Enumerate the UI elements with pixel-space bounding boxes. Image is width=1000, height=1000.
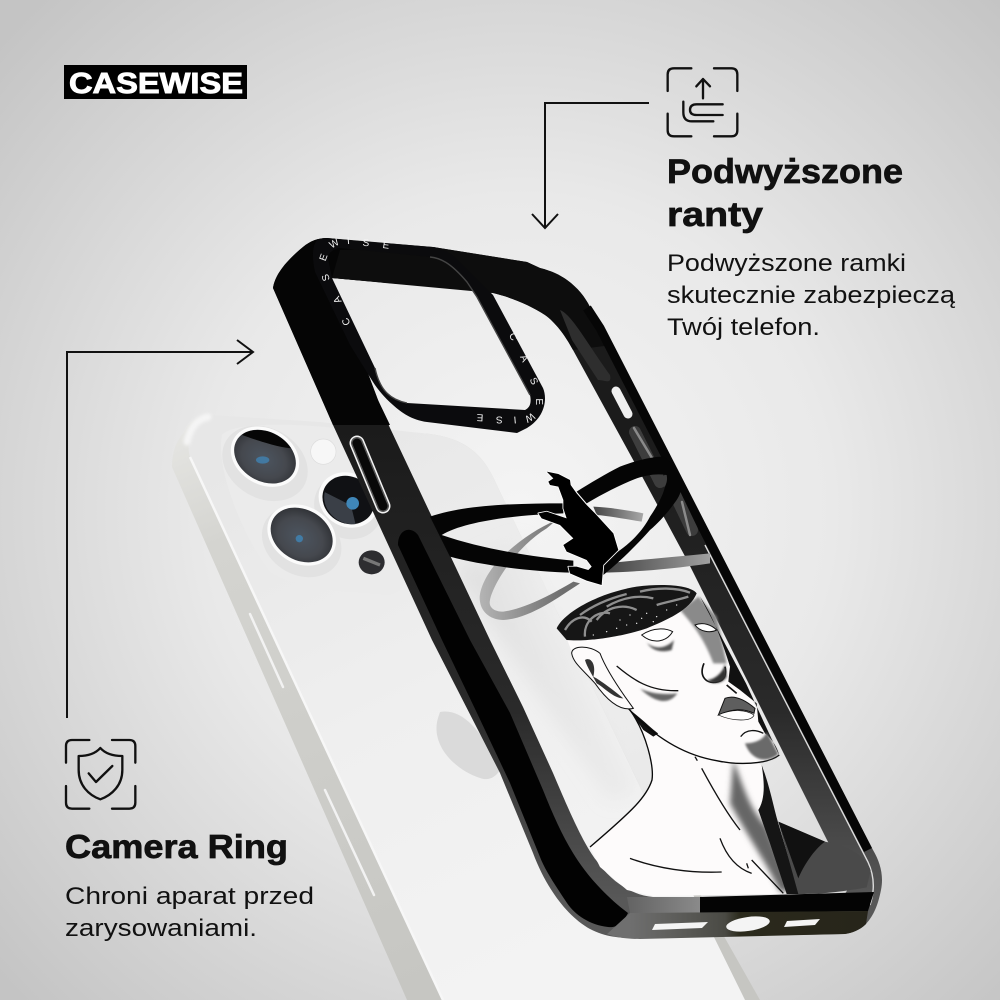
- arrow: to camera ring: [67, 340, 253, 718]
- ring logo text: [318, 236, 544, 425]
- text: camera ring description: zarysowaniami.: [65, 915, 257, 942]
- halo rings and diver: [430, 457, 710, 620]
- eyes: [642, 629, 673, 641]
- phone back: [189, 415, 745, 1000]
- text: camera ring description: [65, 883, 314, 942]
- camera ring: [313, 236, 545, 433]
- hair sparkles: [593, 604, 677, 636]
- logo: CASEWISE: CASEWISE: [69, 68, 243, 100]
- black phone case: [273, 238, 882, 939]
- lens top: [220, 414, 310, 499]
- sensor: [359, 550, 385, 574]
- nose: [702, 663, 737, 693]
- white phone: [172, 411, 760, 1000]
- ring logo text: W: [522, 410, 536, 424]
- ring logo text: W: [328, 237, 342, 251]
- case top black: [273, 238, 400, 425]
- hair: [557, 585, 697, 640]
- dark garment: [778, 822, 871, 894]
- ring logo text: E: [318, 252, 331, 263]
- icon: raised edges: [668, 68, 737, 136]
- phone seen through case: [455, 540, 643, 800]
- diving figure: [538, 472, 618, 585]
- lens shadow areas: [209, 411, 321, 516]
- heading: camera ring: Camera Ring: [65, 828, 288, 865]
- ring logo text: C: [506, 331, 519, 343]
- ring logo text: S: [527, 376, 540, 387]
- grey halo: [480, 507, 710, 620]
- neck shadow: [730, 760, 793, 892]
- right band highlight: [705, 545, 873, 905]
- camera module: [221, 425, 404, 595]
- face shadow: [700, 597, 779, 755]
- inner band panel: [560, 310, 610, 381]
- cameras: [209, 411, 394, 591]
- arrow: to raised edges: [532, 103, 649, 228]
- ring logo text: S: [496, 414, 503, 425]
- black halo left: [430, 503, 573, 573]
- ring logo text: I: [513, 414, 517, 425]
- icon: shield check: [66, 740, 135, 809]
- text: camera ring description: Chroni aparat przed: [65, 883, 314, 910]
- left band black slot: [398, 530, 628, 927]
- right band black edge: [587, 308, 868, 850]
- ring bevel: [375, 257, 530, 403]
- top band: [332, 247, 612, 350]
- ring logo text: E: [533, 398, 544, 405]
- neck and shoulders: [590, 708, 799, 896]
- side button: [357, 443, 383, 506]
- ring logo text: S: [320, 272, 333, 282]
- lens right: [308, 462, 388, 538]
- lens bottom: [256, 492, 347, 578]
- head: [557, 585, 779, 763]
- logo on back: [436, 712, 500, 779]
- text: raised edges description: Podwyższone ramki: [667, 250, 906, 277]
- black halo right: [577, 457, 682, 575]
- lens glints: [256, 456, 359, 542]
- text: raised edges description: skutecznie zabezpieczą: [667, 282, 956, 309]
- flash: [311, 439, 336, 464]
- ring logo text: E: [382, 240, 390, 252]
- ring logo text: C: [340, 316, 353, 327]
- bottom cutouts: [652, 914, 820, 934]
- ring logo text: S: [362, 238, 370, 249]
- ring logo text: E: [476, 411, 484, 422]
- text: raised edges description: Twój telefon.: [667, 314, 820, 341]
- ring logo text: I: [347, 236, 350, 247]
- phone rim: [172, 415, 760, 1000]
- lips: [718, 697, 755, 715]
- ring logo text: A: [332, 294, 344, 305]
- bottom lip: [607, 911, 868, 939]
- ring logo text: A: [517, 353, 530, 364]
- rim highlight: [190, 457, 443, 1000]
- right band buttons: [616, 391, 692, 535]
- text: raised edges description: [667, 250, 956, 341]
- heading: raised edges: Podwyższone: [667, 153, 903, 191]
- neck lines: [630, 757, 783, 893]
- forehead shadow: [680, 597, 727, 663]
- cheek line: [617, 666, 678, 691]
- portrait illustration: [557, 585, 871, 896]
- case frame: [273, 238, 882, 938]
- heading: raised edges: [667, 153, 903, 234]
- ear: [572, 647, 633, 709]
- heading: raised edges: ranty: [667, 196, 763, 234]
- bottom strip: [627, 897, 700, 913]
- side button: [250, 614, 374, 895]
